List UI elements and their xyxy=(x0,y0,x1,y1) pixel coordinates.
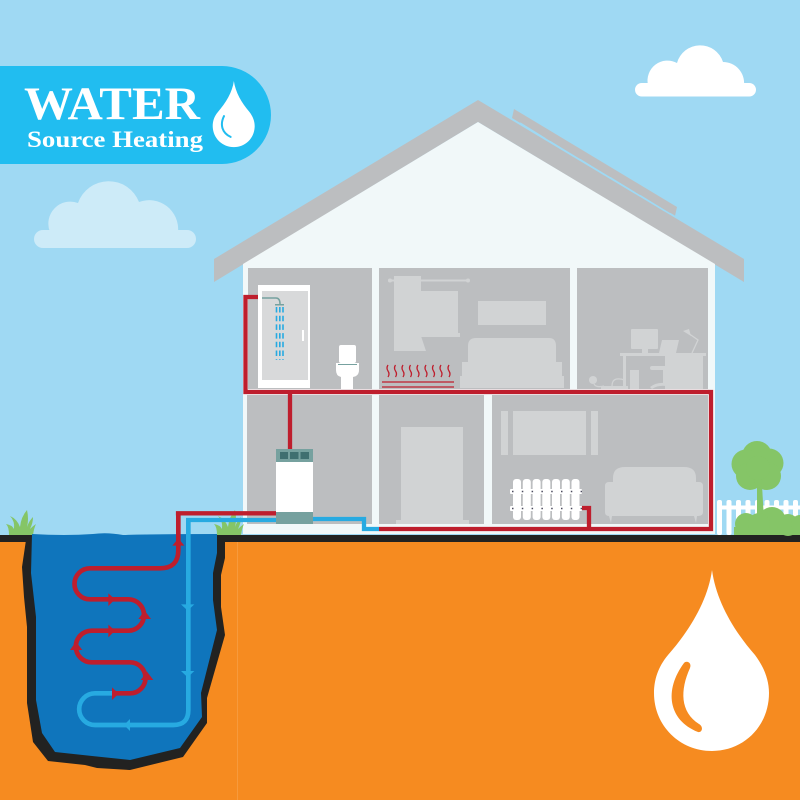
door xyxy=(396,427,469,524)
house roof xyxy=(214,100,744,282)
red pipe coil xyxy=(70,513,184,700)
large water drop xyxy=(654,570,769,751)
living room TV xyxy=(501,411,598,455)
cloud: left xyxy=(34,181,196,248)
shower xyxy=(258,285,310,388)
living room sofa xyxy=(605,467,703,523)
pond water xyxy=(31,533,217,760)
heat pump unit xyxy=(276,449,313,524)
tree xyxy=(732,441,784,520)
title banner xyxy=(0,66,271,164)
title: WATER: WATER xyxy=(24,78,201,130)
bush xyxy=(734,507,800,536)
toilet xyxy=(336,345,359,389)
bedroom furniture xyxy=(388,276,564,388)
subtitle: Source Heating: Source Heating xyxy=(27,127,204,152)
pond rock outline xyxy=(22,540,225,770)
underfloor heating xyxy=(382,365,454,387)
radiator xyxy=(510,479,582,520)
rooms xyxy=(247,268,708,524)
house walls xyxy=(243,122,715,534)
house heating pipes xyxy=(176,297,711,529)
pipe loop in pond xyxy=(70,513,194,731)
house return pipes xyxy=(186,519,379,529)
solar panels xyxy=(510,109,677,216)
icon: small water drop xyxy=(213,81,255,147)
cloud: top right xyxy=(635,45,756,96)
blue pipe loop xyxy=(79,520,194,731)
ground: orange soil xyxy=(0,535,800,800)
fence xyxy=(717,500,800,535)
grass tufts xyxy=(6,510,244,535)
office furniture xyxy=(589,329,706,389)
